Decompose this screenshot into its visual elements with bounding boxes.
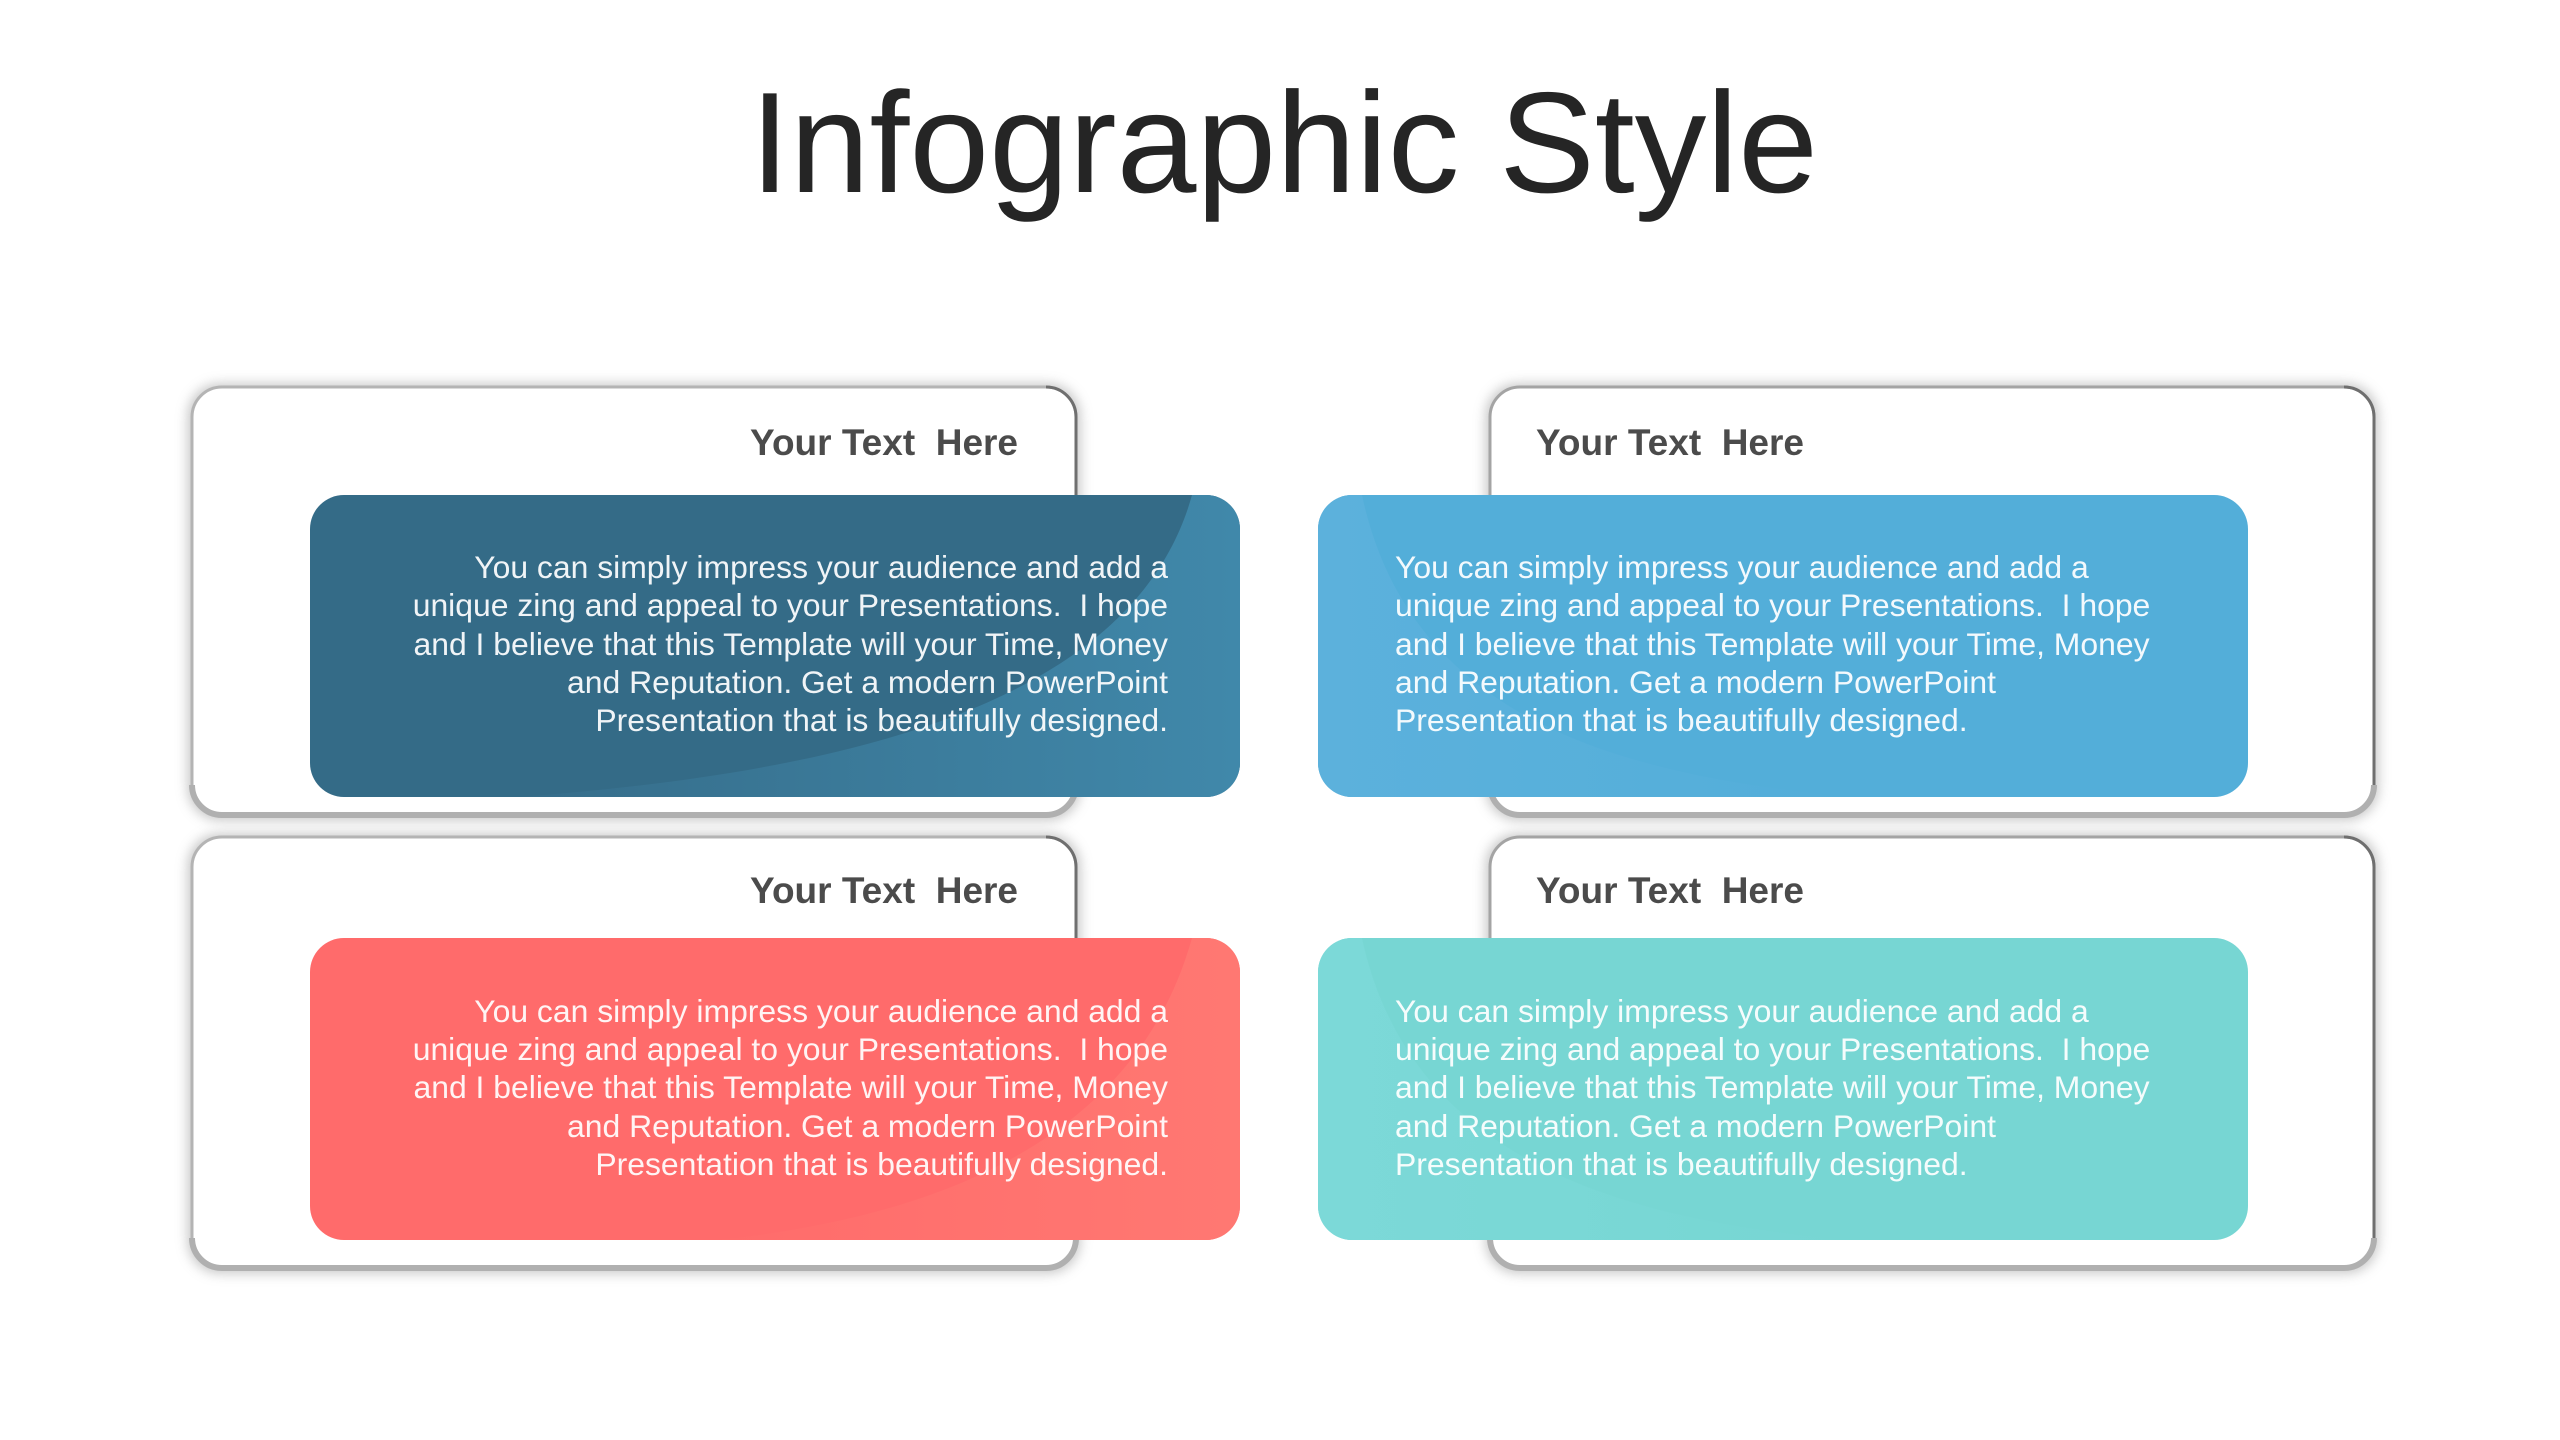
panel: top left card: [188, 384, 1080, 820]
body text: sky blue: unique zing and appeal to your Presentations. I hope: [1395, 587, 2150, 623]
body text: dark teal: unique zing and appeal to your Presentations. I hope: [413, 587, 1168, 623]
body text: coral: Presentation that is beautifully designed.: [595, 1146, 1168, 1182]
body text: sky blue: and I believe that this Template will your Time, Money: [1395, 626, 2150, 662]
body text: dark teal: [413, 549, 1168, 738]
body text: coral: and I believe that this Template will your Time, Money: [413, 1069, 1168, 1105]
body text: coral: unique zing and appeal to your Presentations. I hope: [413, 1031, 1168, 1067]
body text: aqua: and I believe that this Template will your Time, Money: [1395, 1069, 2150, 1105]
body text: sky blue: You can simply impress your audience and add a: [1395, 549, 2089, 585]
body text: dark teal: Presentation that is beautifully designed.: [595, 702, 1168, 738]
panel: bottom left card: [188, 834, 1080, 1273]
body text: dark teal: You can simply impress your audience and add a: [474, 549, 1168, 585]
panel: dark teal text box: [310, 495, 1240, 797]
heading: top left: Your Text Here: [750, 422, 1018, 463]
heading: bottom right: Your Text Here: [1536, 870, 1804, 911]
body text: aqua: [1395, 993, 2150, 1182]
panel: coral text box: [310, 938, 1240, 1240]
body text: sky blue: Presentation that is beautifully designed.: [1395, 702, 1968, 738]
body text: coral: and Reputation. Get a modern PowerPoint: [567, 1108, 1168, 1144]
body text: dark teal: and I believe that this Template will your Time, Money: [413, 626, 1168, 662]
panel: top right card: [1486, 384, 2378, 820]
body text: sky blue: and Reputation. Get a modern PowerPoint: [1395, 664, 1996, 700]
heading: top right: Your Text Here: [1536, 422, 1804, 463]
heading: bottom left: Your Text Here: [750, 870, 1018, 911]
body text: dark teal: and Reputation. Get a modern PowerPoint: [567, 664, 1168, 700]
panel: aqua text box: [1318, 938, 2248, 1240]
body text: aqua: You can simply impress your audience and add a: [1395, 993, 2089, 1029]
body text: aqua: Presentation that is beautifully designed.: [1395, 1146, 1968, 1182]
panel: sky blue text box: [1318, 495, 2248, 797]
body text: coral: You can simply impress your audience and add a: [474, 993, 1168, 1029]
body text: aqua: unique zing and appeal to your Presentations. I hope: [1395, 1031, 2150, 1067]
panel: bottom right card: [1486, 834, 2378, 1273]
title: Infographic Style: [750, 63, 1818, 223]
body text: aqua: and Reputation. Get a modern PowerPoint: [1395, 1108, 1996, 1144]
body text: sky blue: [1395, 549, 2150, 738]
body text: coral: [413, 993, 1168, 1182]
